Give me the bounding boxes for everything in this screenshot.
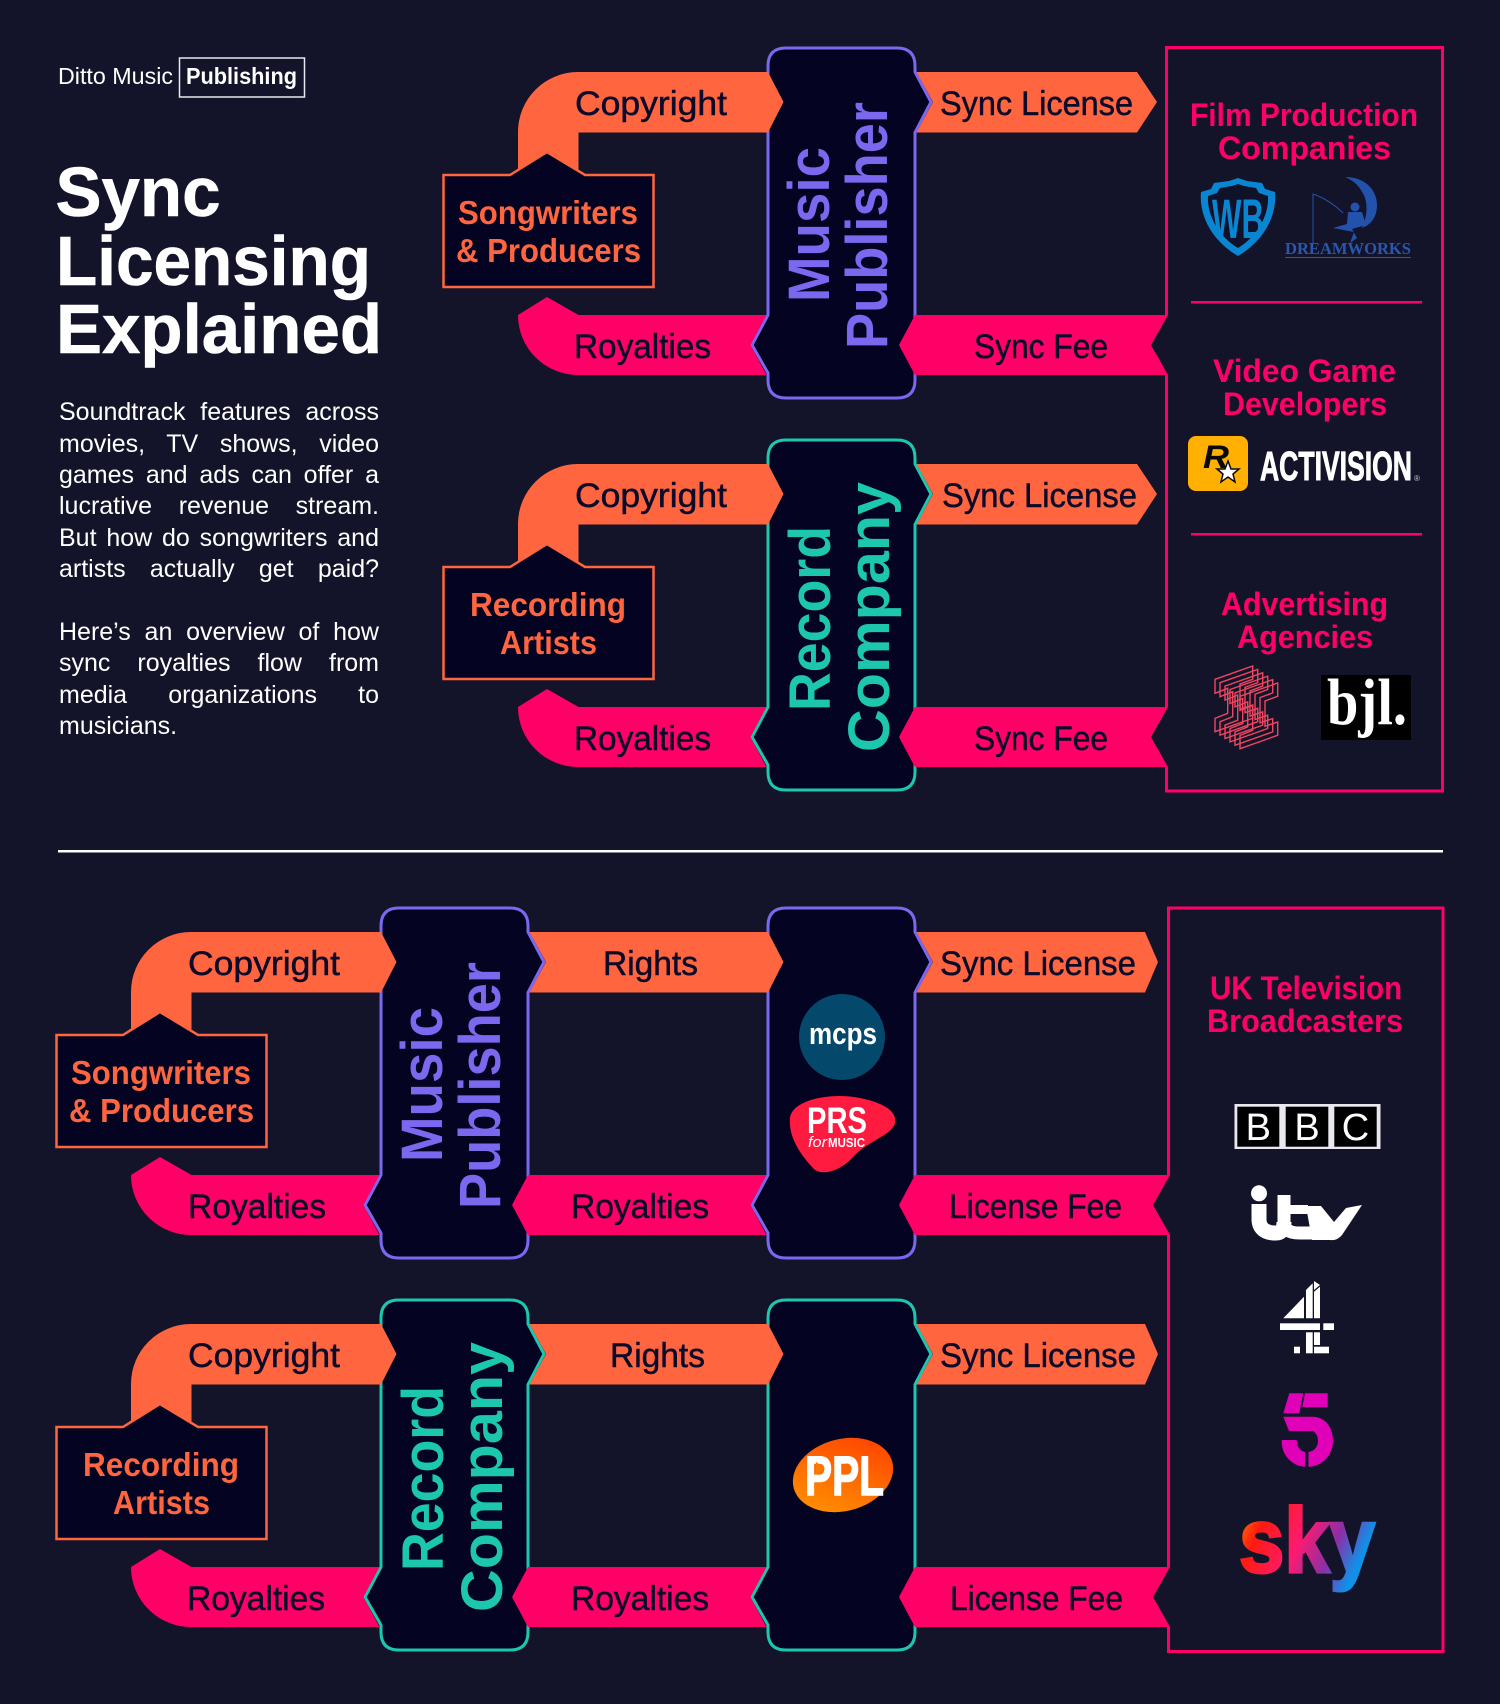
logo: bjl: bjl. — [1327, 666, 1407, 739]
heading: video game developers — [1213, 353, 1396, 422]
panel frame — [1166, 48, 1442, 791]
arrow: royalties — [518, 297, 766, 375]
intro text: But how do songwriters and — [59, 524, 379, 552]
arrow: sync license — [916, 464, 1157, 524]
publisher box — [365, 908, 544, 1258]
arrow: copyright: Copyright — [188, 945, 341, 983]
publisher label: Publisher — [448, 962, 513, 1209]
record company box — [752, 440, 931, 790]
publisher label — [777, 102, 900, 349]
arrow: sync license: Sync License — [940, 85, 1133, 123]
record company label: Record — [391, 1386, 456, 1571]
record company label: Record — [778, 526, 843, 711]
logo: ppl: PPL — [805, 1444, 884, 1507]
arrow: royalties to songwriters — [131, 1157, 380, 1235]
arrow: sync license: Sync License — [942, 477, 1137, 515]
arrow: rights: Rights — [603, 945, 698, 983]
title: Licensing — [56, 222, 371, 300]
arrow: sync license — [916, 1324, 1158, 1384]
record company label — [391, 1342, 515, 1612]
panel: media organisations — [1166, 48, 1442, 791]
arrow: royalties — [518, 689, 766, 767]
intro text: sync royalties flow from — [59, 649, 379, 677]
songwriters box: & Producers — [456, 232, 641, 269]
heading: advertising agencies: Advertising — [1221, 586, 1388, 622]
songwriters box: & Producers — [69, 1092, 254, 1129]
recording artists box: Artists — [113, 1484, 210, 1521]
intro text: games and ads can offer a — [59, 461, 379, 489]
arrow: copyright: Copyright — [575, 477, 728, 515]
songwriters box: Songwriters — [71, 1054, 251, 1091]
arrow: rights — [530, 932, 784, 992]
arrow: sync fee — [899, 707, 1168, 767]
intro text: artists actually get paid? — [59, 555, 379, 583]
arrow: royalties to artists: Royalties — [187, 1580, 325, 1618]
publisher label: Music — [390, 1007, 455, 1162]
logo: rockstar: R — [1203, 439, 1229, 475]
intro text: movies, TV shows, video — [59, 430, 379, 458]
logo: rockstar — [1188, 436, 1248, 491]
arrow: sync license — [916, 72, 1157, 132]
record company label: Company — [450, 1342, 515, 1612]
arrow: sync fee: Sync Fee — [974, 720, 1108, 758]
heading: uk television broadcasters: UK Television — [1210, 970, 1402, 1006]
arrow: royalties to songwriters: Royalties — [188, 1188, 326, 1226]
arrow: copyright: Copyright — [575, 85, 728, 123]
title — [56, 153, 382, 368]
logo: prs for music: for — [808, 1134, 828, 1151]
mcps prs box — [752, 908, 931, 1258]
publishing tag — [180, 58, 304, 97]
arrow: sync fee: Sync Fee — [974, 328, 1108, 366]
arrow: royalties to record company: Royalties — [571, 1580, 709, 1618]
logo: isometric agency mark — [1215, 666, 1278, 749]
arrow: rights — [530, 1324, 784, 1384]
record company box — [365, 1300, 544, 1650]
logo: bbc: C — [1342, 1107, 1369, 1149]
logo: warner bros shield — [1201, 178, 1275, 256]
arrow: license fee: License Fee — [950, 1580, 1123, 1618]
publisher label: Music — [777, 147, 842, 302]
logo: channel 4 — [1280, 1281, 1334, 1353]
logo: prs for music: PRS — [807, 1100, 867, 1141]
arrow: sync fee — [899, 315, 1168, 375]
arrow: copyright — [518, 72, 784, 172]
logo: ppl — [784, 1427, 902, 1523]
flow: recording artists via record company to media — [444, 440, 1168, 790]
publisher box — [752, 48, 931, 398]
recording artists box: Recording — [470, 586, 626, 623]
arrow: license fee — [899, 1567, 1170, 1627]
intro text: lucrative revenue stream. — [59, 492, 379, 520]
panel: uk television broadcasters — [1168, 908, 1443, 1652]
logo: sky: sky — [1239, 1490, 1375, 1592]
title: Explained — [56, 290, 382, 368]
heading: uk television broadcasters: Broadcasters — [1207, 1003, 1403, 1039]
arrow: royalties to record company — [512, 1567, 766, 1627]
logo: prs for music — [790, 1096, 895, 1172]
arrow: copyright: Copyright — [188, 1337, 341, 1375]
heading: advertising agencies: Agencies — [1237, 619, 1373, 655]
songwriters box — [444, 152, 654, 287]
logo: mcps — [799, 994, 885, 1080]
heading: advertising agencies — [1221, 586, 1388, 655]
publisher label: Publisher — [835, 102, 900, 349]
arrow: royalties to publisher — [512, 1175, 766, 1235]
publisher label — [390, 962, 513, 1209]
logo: activision — [1260, 443, 1420, 489]
logo: bbc: B — [1294, 1107, 1320, 1149]
heading: film production companies: Film Production — [1190, 97, 1418, 133]
songwriters box: Songwriters — [458, 194, 638, 231]
recording artists box: Recording — [83, 1446, 239, 1483]
logo: mcps: mcps — [809, 1016, 877, 1051]
arrow: sync license: Sync License — [940, 945, 1136, 983]
arrow: copyright — [131, 932, 396, 1032]
ppl box — [752, 1300, 931, 1650]
logo: channel 5 — [1282, 1393, 1333, 1467]
logo: activision: ® — [1414, 474, 1420, 483]
heading: video game developers: Developers — [1223, 386, 1387, 422]
logo: warner bros shield: WB — [1212, 187, 1264, 250]
heading: uk television broadcasters — [1207, 970, 1403, 1039]
panel frame — [1168, 908, 1443, 1652]
intro text: Here’s an overview of how — [59, 618, 379, 646]
record company label — [778, 482, 902, 752]
heading: film production companies — [1190, 97, 1418, 166]
flow: songwriters via music publisher to media — [444, 48, 1168, 398]
recording artists box: Artists — [500, 624, 597, 661]
logo: prs for music: MUSIC — [828, 1135, 866, 1150]
arrow: royalties to publisher: Royalties — [571, 1188, 709, 1226]
arrow: copyright — [131, 1324, 396, 1424]
flow: songwriters via publisher and mcps/prs to broadcasters — [56, 908, 1170, 1258]
logo: activision: ACTIVISION — [1260, 443, 1412, 489]
logo: itv — [1251, 1185, 1362, 1240]
logo: dreamworks — [1285, 177, 1411, 258]
logo: dreamworks: DREAMWORKS — [1285, 239, 1411, 258]
arrow: copyright — [518, 464, 784, 564]
title: Sync — [56, 153, 220, 231]
arrow: license fee: License Fee — [949, 1188, 1122, 1226]
intro text: Soundtrack features across — [59, 398, 379, 426]
arrow: rights: Rights — [610, 1337, 705, 1375]
intro text: musicians. — [59, 712, 177, 740]
arrow: royalties: Royalties — [574, 720, 711, 758]
arrow: royalties to artists — [131, 1549, 380, 1627]
songwriters box — [56, 1012, 266, 1147]
arrow: royalties: Royalties — [574, 328, 711, 366]
logo: bbc: B — [1246, 1107, 1271, 1149]
recording artists box — [56, 1404, 266, 1539]
logo: bbc — [1234, 1104, 1380, 1149]
arrow: sync license: Sync License — [940, 1337, 1136, 1375]
brand lockup — [58, 58, 304, 97]
flow: recording artists via record company and ppl to broadcasters — [56, 1300, 1170, 1650]
publishing tag: Publishing — [186, 63, 297, 89]
recording artists box — [444, 544, 654, 679]
intro text — [59, 398, 380, 740]
arrow: license fee — [899, 1175, 1170, 1235]
heading: video game developers: Video Game — [1213, 353, 1396, 389]
intro text: media organizations to — [59, 681, 379, 709]
brand name: Ditto Music — [58, 63, 173, 89]
record company label: Company — [837, 482, 902, 752]
arrow: sync license — [916, 932, 1158, 992]
heading: film production companies: Companies — [1218, 130, 1391, 166]
